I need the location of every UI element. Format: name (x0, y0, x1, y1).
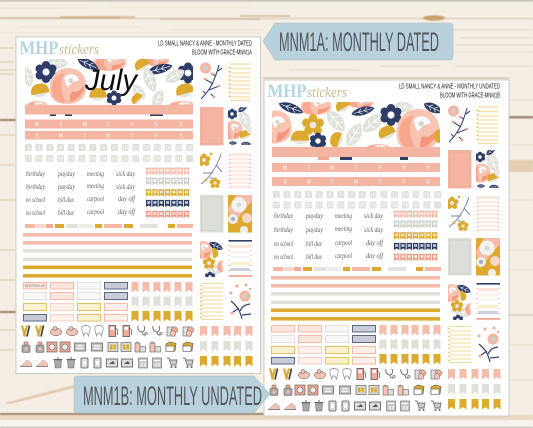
script labels (26, 169, 136, 217)
date squares: 14 (165, 146, 171, 152)
logo: MHP stickers (268, 82, 347, 102)
weekday strip Monday start: T (106, 122, 110, 128)
date squares: 15 (176, 146, 182, 152)
date squares: 8 (350, 193, 353, 199)
date squares: 9 (113, 146, 116, 152)
weekday strip Monday start: F (130, 122, 134, 128)
date squares: 19 (47, 157, 53, 163)
date squares: 7 (339, 193, 342, 199)
weekday strip Monday start: T (59, 122, 63, 128)
tag: MNM1B monthly undated (74, 376, 270, 413)
date squares: 23 (90, 157, 96, 163)
script labels (274, 211, 384, 261)
lower sheet content (268, 105, 501, 411)
icon stickers (20, 326, 194, 368)
date squares: 4 (307, 193, 310, 199)
weekday strip Sunday start: T (83, 134, 87, 140)
weekday strip Monday start: T (307, 166, 311, 172)
date squares: 12 (144, 146, 150, 152)
date squares: 3 (296, 193, 299, 199)
date squares: 16 (435, 193, 440, 199)
weekday strip Sunday start: F (154, 134, 158, 140)
date squares: 5 (318, 193, 321, 199)
logo: MHP stickers: MHP (268, 82, 306, 102)
weekday strip Monday start: T (354, 166, 358, 172)
weekday strip Sunday start (272, 177, 440, 186)
date squares: 13 (155, 146, 160, 152)
mini flag banners (393, 211, 438, 261)
script labels: birthday (274, 225, 293, 234)
date squares: 12 (392, 193, 398, 199)
weekday strip Sunday start (25, 131, 193, 140)
date squares: 5 (70, 146, 73, 152)
label boxes (24, 282, 128, 321)
date squares: 1 (27, 146, 30, 152)
weekday strip Sunday start: S (283, 180, 287, 186)
date squares: 22 (79, 157, 85, 163)
date squares: 20 (306, 203, 311, 209)
weekday strip Sunday start: T (330, 180, 334, 186)
weekday strip Sunday start: S (35, 134, 39, 140)
script labels: meeting (335, 211, 352, 220)
date squares: 26 (370, 203, 376, 209)
date squares: 11 (133, 146, 139, 152)
date squares: 9 (361, 193, 364, 199)
date squares: 22 (327, 203, 333, 209)
date squares (273, 191, 441, 209)
date squares: 8 (102, 146, 105, 152)
script labels: payday (305, 211, 323, 220)
date squares: 26 (122, 157, 128, 163)
floral banner with July (25, 59, 193, 116)
date squares: 14 (413, 193, 419, 199)
sheet title: BLOOM WITH GRACE-MNM1A (192, 50, 252, 56)
weekday strip Sunday start: W (106, 134, 111, 140)
month title July: July (84, 64, 139, 97)
tiny label text: BREASTFEEDING LINE (25, 284, 45, 288)
date squares: 3 (48, 146, 51, 152)
script labels: day off (118, 207, 136, 216)
script labels: meeting (87, 181, 104, 190)
script labels: sick day (364, 225, 383, 234)
weekday strip Monday start: F (378, 166, 382, 172)
script labels: birthday (26, 169, 45, 178)
sheet: MNM1B monthly undated (258, 80, 509, 416)
date squares: 10 (122, 146, 128, 152)
weekday strip Sunday start: S (179, 134, 183, 140)
weekday strip Monday start: S (179, 122, 183, 128)
date squares: 17 (274, 203, 279, 209)
script labels: carpool (335, 238, 352, 247)
side column stickers (194, 62, 253, 366)
date squares: 7 (91, 146, 94, 152)
date squares: 28 (392, 203, 398, 209)
washi stripes (271, 267, 441, 321)
date squares: 29 (403, 203, 408, 209)
weekday strip Sunday start: T (130, 134, 134, 140)
logo: MHP stickers: MHP (20, 39, 58, 59)
logo: MHP stickers: stickers (307, 85, 347, 101)
tag: MNM1A monthly dated (263, 23, 453, 60)
washi stripes (23, 224, 193, 278)
date squares: 10 (370, 193, 376, 199)
script labels: no school (274, 239, 293, 248)
flag stickers (132, 282, 192, 322)
date squares: 16 (187, 146, 192, 152)
mini flag banners (145, 168, 190, 218)
date squares: 18 (284, 203, 290, 209)
weekday strip Monday start: S (426, 166, 430, 172)
date squares: 15 (424, 193, 430, 199)
date squares: 30 (413, 203, 419, 209)
weekday strip Sunday start: F (402, 180, 406, 186)
flag stickers (380, 325, 440, 364)
weekday strip Monday start (272, 163, 440, 172)
date squares: 28 (144, 157, 150, 163)
date squares: 13 (403, 193, 408, 199)
date squares: 6 (81, 146, 84, 152)
date squares: 29 (155, 157, 160, 163)
icon stickers (268, 368, 442, 411)
date squares: 21 (317, 203, 322, 209)
sheet title: LD SMALL NANCY & ANNE - MONTHLY DATED (158, 40, 252, 48)
script labels: meeting (87, 169, 104, 178)
script labels: no school (26, 208, 45, 217)
weekday strip Monday start: M (283, 166, 287, 172)
date squares: 25 (360, 203, 365, 209)
weekday strip Monday start: M (35, 122, 39, 128)
date squares: 20 (58, 157, 63, 163)
script labels: bill due (58, 208, 74, 217)
script labels: meeting (335, 224, 352, 233)
date squares: 31 (424, 203, 430, 209)
script labels: bill due (306, 252, 322, 261)
script labels: payday (305, 225, 323, 234)
script labels: sick day (364, 211, 383, 220)
script labels: sick day (116, 182, 135, 191)
pink header strip (272, 147, 440, 157)
script labels: carpool (87, 207, 104, 216)
date squares: 25 (112, 157, 117, 163)
date squares: 23 (338, 203, 344, 209)
logo: MHP stickers: stickers (59, 42, 99, 58)
sheet title (399, 84, 500, 100)
script labels: birthday (274, 211, 293, 220)
script labels: no school (274, 252, 293, 261)
script labels: carpool (335, 251, 352, 260)
sheet: MNM1A monthly dated (16, 37, 260, 374)
label boxes (272, 326, 376, 364)
script labels: bill due (306, 239, 322, 248)
sheet title (158, 40, 252, 56)
date squares: 21 (69, 157, 74, 163)
weekday strip Sunday start: T (378, 180, 382, 186)
date squares: 2 (286, 193, 289, 199)
date squares (25, 144, 193, 163)
weekday strip Monday start: W (330, 166, 335, 172)
date squares: 24 (349, 203, 355, 209)
weekday strip Sunday start: W (354, 180, 359, 186)
script labels: no school (26, 195, 45, 204)
date squares: 19 (295, 203, 301, 209)
date squares: 1 (275, 193, 278, 199)
date squares: 27 (381, 203, 387, 209)
script labels: day off (118, 194, 136, 203)
script labels: payday (57, 182, 75, 191)
script labels: sick day (116, 169, 135, 178)
weekday strip Monday start: S (154, 122, 158, 128)
weekday strip Monday start: W (83, 122, 88, 128)
date squares: 31 (176, 157, 182, 163)
weekday strip Sunday start: S (426, 180, 430, 186)
script labels: day off (366, 251, 384, 260)
side column stickers (442, 105, 501, 410)
floral banner (272, 102, 440, 160)
date squares: 6 (329, 193, 332, 199)
script labels: payday (57, 169, 75, 178)
weekday strip Sunday start: M (307, 180, 311, 186)
date squares: 17 (26, 157, 31, 163)
pink header strip (25, 105, 193, 114)
date squares: 18 (36, 157, 42, 163)
date squares: 4 (59, 146, 62, 152)
date squares: 11 (381, 193, 387, 199)
script labels: bill due (58, 195, 74, 204)
weekday strip Monday start (25, 120, 193, 128)
date squares: 30 (165, 157, 171, 163)
logo: MHP stickers (20, 39, 99, 59)
script labels: day off (366, 238, 384, 247)
text: MNM1B: MONTHLY UNDATED (83, 381, 262, 411)
script labels: carpool (87, 194, 104, 203)
script labels: birthday (26, 182, 45, 191)
date squares: 24 (101, 157, 107, 163)
date squares: 27 (133, 157, 139, 163)
weekday strip Monday start: S (402, 166, 406, 172)
date squares: 2 (38, 146, 41, 152)
weekday strip Sunday start: M (59, 134, 63, 140)
